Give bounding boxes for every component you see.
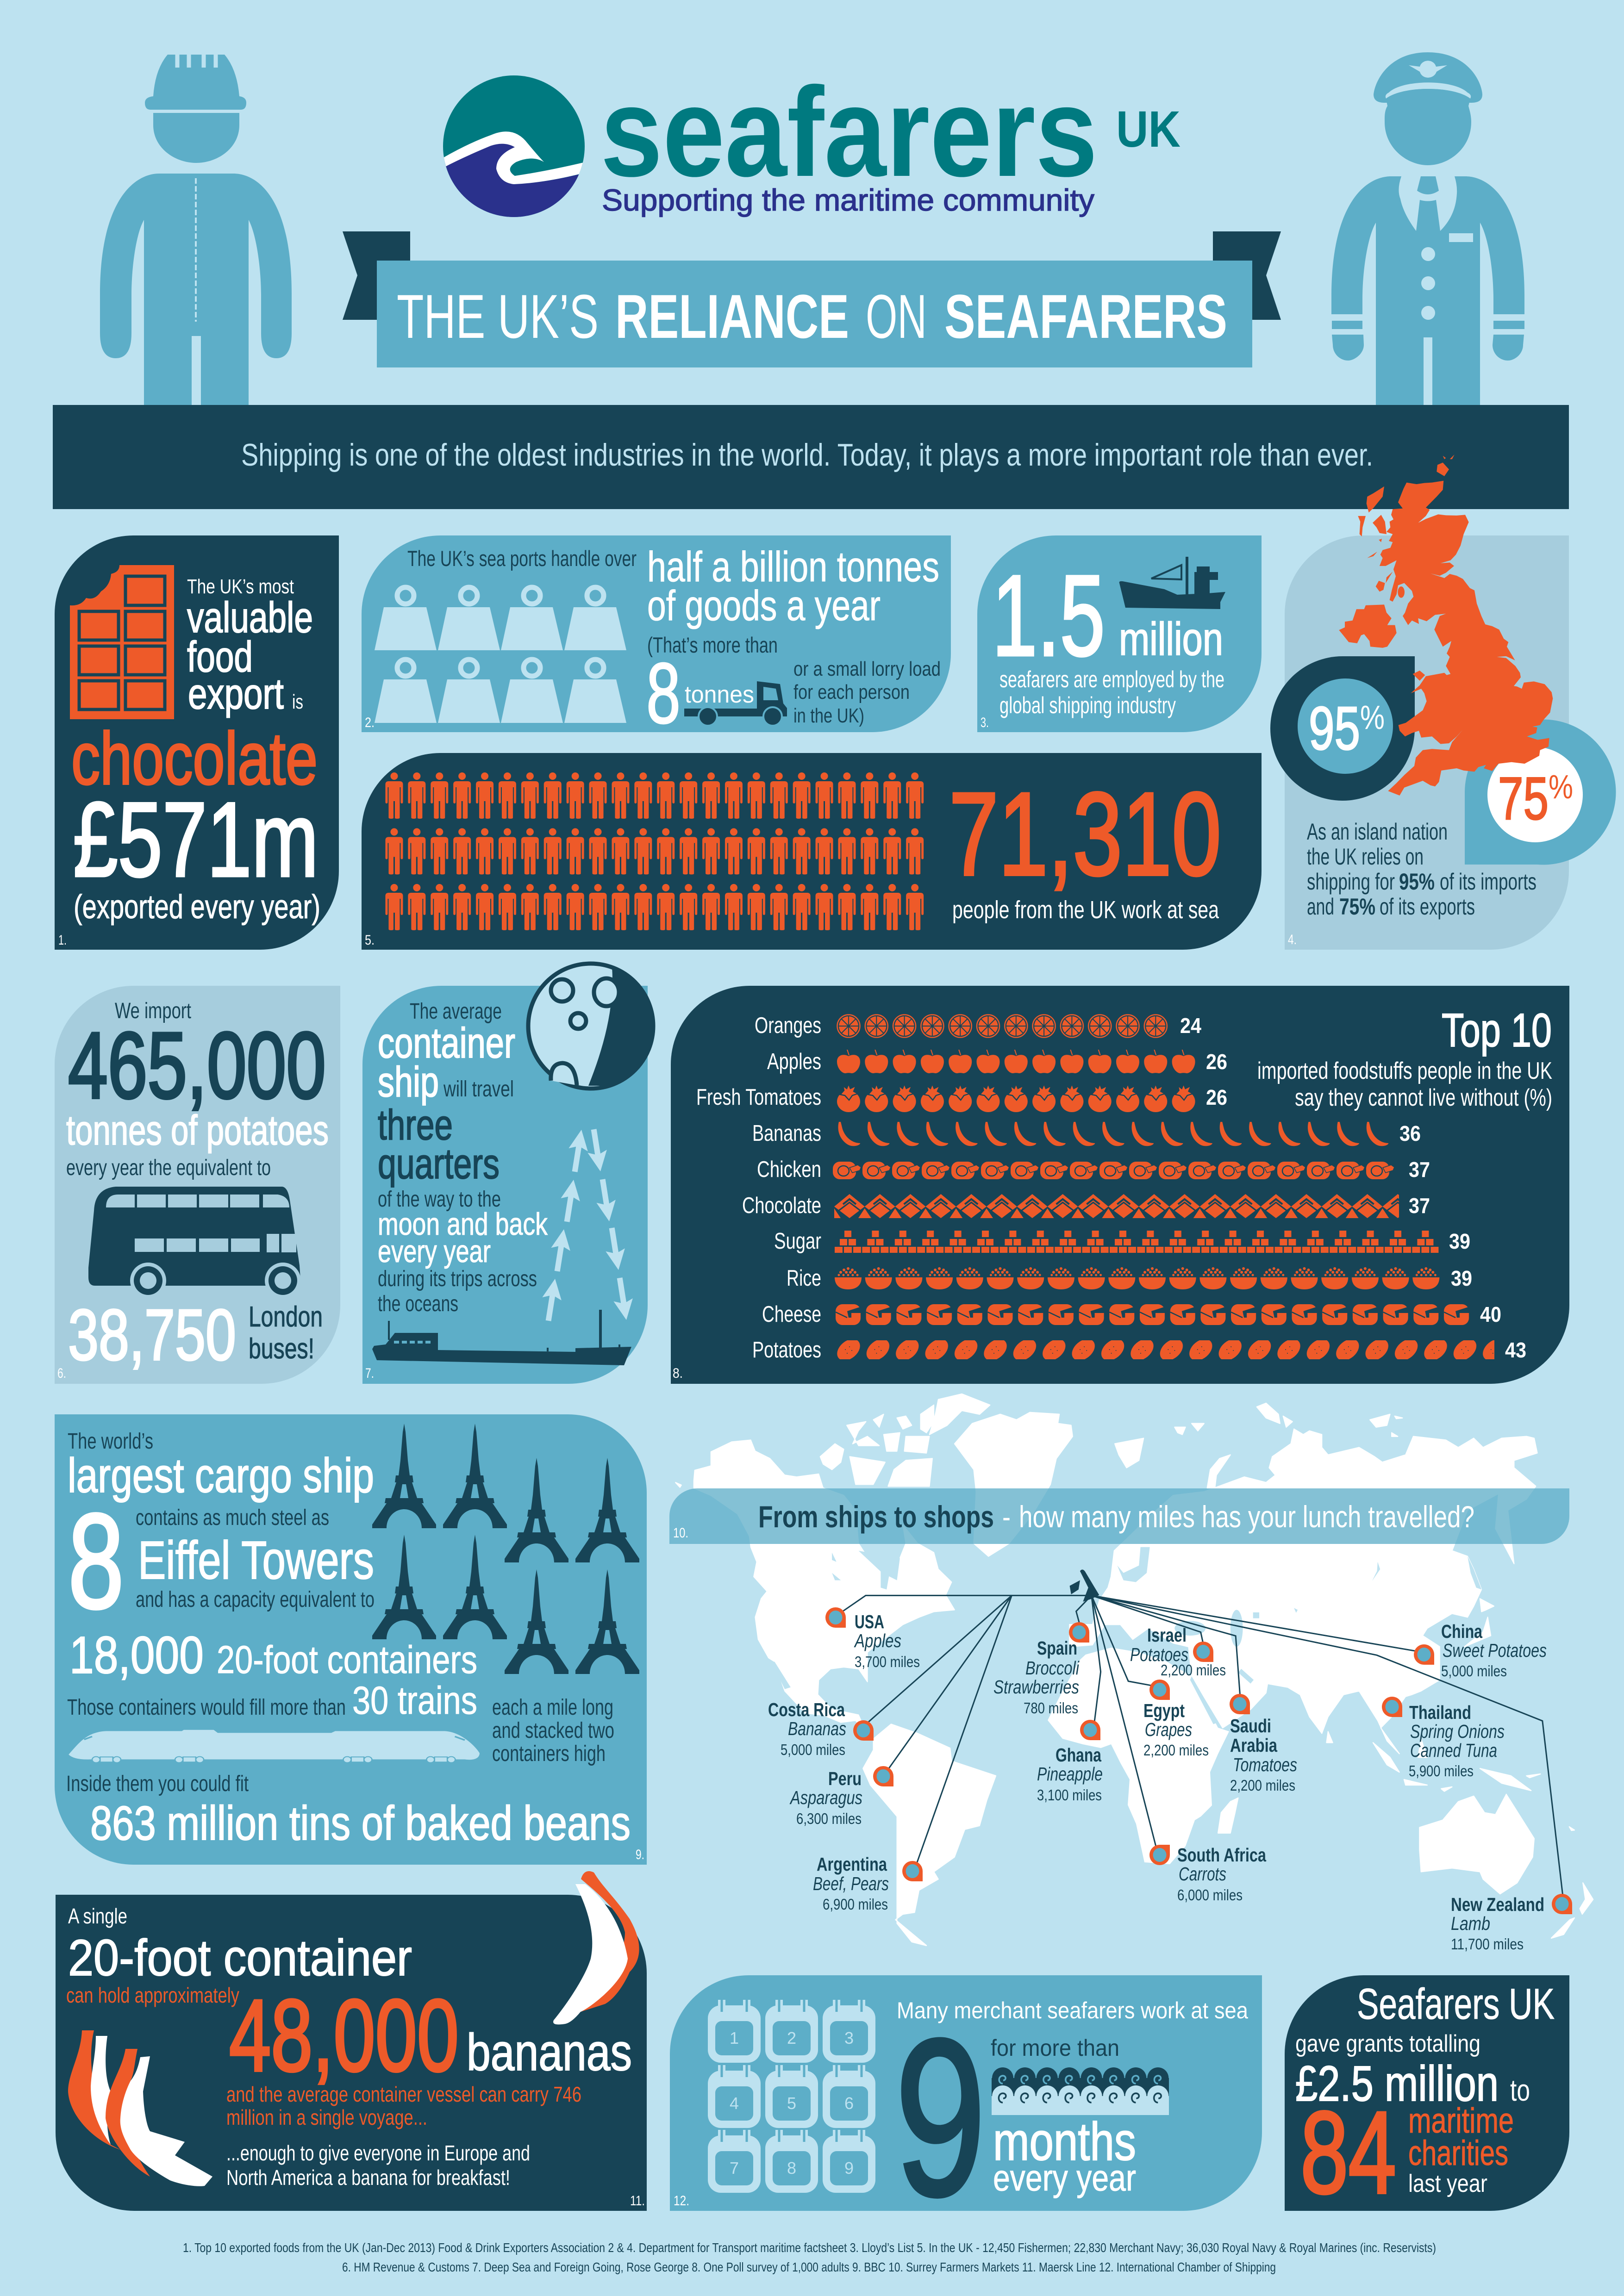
logo wordmark: seafarers: [600, 61, 1098, 203]
text: most valuable food export: The UK’s most: [187, 575, 294, 598]
row: chicken: 37: [1409, 1157, 1430, 1182]
label: Saudi Arabia: 2,200 miles: [1230, 1777, 1295, 1794]
panel 8: top 10 foodstuffs: [671, 986, 1569, 1384]
label: Spain: Spain: [1037, 1637, 1077, 1659]
text: single container: 20-foot container: [68, 1929, 412, 1986]
text: seafarers employed: [999, 666, 1224, 718]
text: baked beans: [66, 1772, 631, 1850]
text: small lorry load: or a small lorry load: [793, 658, 941, 680]
text: sea ports handle: The UK’s sea ports handle over: [407, 546, 637, 571]
row: sugar: [774, 1229, 1470, 1254]
text: island nation: the UK relies on: [1307, 844, 1424, 870]
map: Africa: [1048, 1648, 1229, 1864]
label: Israel: 2,200 miles: [1161, 1661, 1226, 1679]
text: maritime charities: maritime: [1408, 2101, 1514, 2140]
label: South Africa: 6,000 miles: [1177, 1886, 1243, 1904]
text: baked beans: 863 million tins of baked beans: [90, 1797, 631, 1850]
reference 2: 2.: [365, 715, 375, 730]
logo tagline: Supporting the maritime community: [602, 183, 1094, 217]
text: equivalent: every year the equivalent to: [66, 1156, 271, 1180]
label: USA: [854, 1611, 920, 1670]
text: single container: [66, 1904, 412, 2007]
icons: calendars: 4: [730, 2094, 739, 2113]
icon: banana bunch: [68, 2030, 212, 2186]
pictogram chart: imported foodstuffs: [696, 1013, 1526, 1363]
text: container ship journey: [378, 999, 548, 1316]
icon rows: people: [383, 772, 926, 930]
icons: calendars: 1: [730, 2028, 739, 2047]
text: most valuable food export: is: [292, 691, 303, 713]
text: seafarers employed: seafarers are employed by the: [999, 666, 1224, 692]
figure: 48,000 bananas: 48,000: [229, 1979, 459, 2092]
reference 12: 12.: [674, 2193, 689, 2209]
figure: 8 tonnes: tonnes: [685, 681, 754, 708]
text: container ship journey: will travel: [443, 1077, 514, 1101]
text: container ship journey: three: [378, 1101, 453, 1149]
text: London buses: London: [249, 1301, 323, 1333]
icons: calendars: 3: [844, 2028, 854, 2047]
worker figure: [100, 52, 292, 405]
text: months every year: [993, 2111, 1136, 2198]
row: oranges: Oranges: [755, 1013, 821, 1038]
text: 30 trains: containers high: [492, 1742, 606, 1766]
text: months every year: months: [993, 2111, 1136, 2172]
figure: 1.5 million: 1.5: [992, 551, 1105, 680]
reference 5: 5.: [365, 933, 375, 948]
row: chicken: [757, 1157, 1430, 1182]
row: cheese: [762, 1302, 1501, 1327]
reference 7: 7.: [365, 1366, 374, 1381]
label: New Zealand: 11,700 miles: [1451, 1935, 1524, 1953]
reference 4: 4.: [1288, 932, 1297, 947]
row: oranges: 24: [1180, 1014, 1201, 1038]
row: bananas: 36: [1399, 1121, 1421, 1145]
heading band: 10.: [673, 1525, 688, 1541]
text: London buses: [249, 1301, 323, 1365]
panel 12: nine months: [670, 1975, 1262, 2242]
text: most valuable food export: valuable: [187, 593, 313, 641]
text: largest cargo ship: The world’s: [68, 1429, 153, 1454]
text: container ship journey: The average: [410, 999, 502, 1024]
label: USA: 3,700 miles: [855, 1653, 920, 1670]
icon: waves: [992, 2067, 1169, 2115]
icon: large banana: [553, 1871, 639, 2024]
text: exported every year: (exported every year): [74, 889, 320, 926]
routes: [840, 1595, 1563, 1895]
label: Peru: [789, 1768, 862, 1827]
row: apples: [767, 1049, 1227, 1074]
label: Thailand: 5,900 miles: [1409, 1762, 1474, 1780]
reference 9: 9.: [636, 1847, 644, 1862]
icon: London bus: [88, 1187, 301, 1299]
label: Spain: Broccoli: [1025, 1657, 1080, 1679]
text: island nation: shipping for: [1307, 869, 1395, 895]
text: island nation: 95%: [1399, 869, 1435, 895]
text: island nation: of its imports: [1440, 869, 1537, 895]
row: chocolate: Chocolate: [742, 1193, 821, 1218]
label: Saudi Arabia: Tomatoes: [1233, 1754, 1297, 1775]
figure: 571m: £571m: [73, 780, 319, 899]
text: container ship journey: quarters: [378, 1140, 500, 1188]
text: many merchant seafarers: Many merchant seafarers work at sea: [897, 1997, 1248, 2023]
figure: 75%: 75: [1498, 765, 1549, 832]
label: Spain: [993, 1637, 1080, 1717]
text: small lorry load: for each person: [793, 681, 910, 703]
text: 30 trains: Those containers would fill more than: [67, 1695, 346, 1720]
location pins: [825, 1607, 1572, 1914]
figure: 8 tonnes: [646, 646, 754, 741]
row: apples: 26: [1206, 1050, 1227, 1074]
heading: top 10: Top 10: [1442, 1004, 1552, 1057]
icons: calendars: 5: [787, 2094, 796, 2113]
figure: 84: 84: [1300, 2088, 1396, 2218]
figure: 71,310: 71,310: [949, 768, 1221, 900]
text: people work at sea: people from the UK work at sea: [952, 896, 1219, 924]
label: Egypt: [1143, 1700, 1209, 1759]
label: Thailand: Spring Onions: [1410, 1721, 1505, 1742]
text: container ship journey: moon and back: [378, 1207, 548, 1242]
text: we import: We import: [115, 999, 191, 1023]
label: Israel: Israel: [1147, 1624, 1187, 1646]
text: maritime charities: [1408, 2101, 1514, 2197]
text: island nation: As an island nation: [1307, 819, 1448, 845]
heading: top 10: [1257, 1004, 1552, 1111]
logo UK: UK: [1116, 101, 1181, 158]
label: Peru: Asparagus: [789, 1787, 862, 1808]
row: chocolate: 37: [1409, 1194, 1430, 1218]
title banner: [343, 231, 1281, 367]
title banner: SEAFARERS: [944, 282, 1227, 351]
label: China: China: [1441, 1621, 1483, 1642]
icons: Eiffel Towers: [372, 1424, 639, 1674]
label: Ghana: [1037, 1744, 1103, 1804]
text: half a billion tonnes: half a billion tonnes: [647, 543, 939, 591]
panel 9: largest cargo ship: [55, 1414, 647, 1865]
label: Argentina: [813, 1854, 889, 1913]
label: Costa Rica: Costa Rica: [768, 1699, 845, 1720]
figure: 48,000 bananas: bananas: [467, 2023, 632, 2081]
figure: 95%: %: [1360, 699, 1385, 736]
text: most valuable food export: food: [187, 633, 253, 681]
text: half a billion tonnes: [647, 543, 939, 657]
icon: moon: [528, 958, 657, 1089]
text: seafarers employed: global shipping industry: [999, 692, 1176, 718]
label: Costa Rica: [768, 1699, 846, 1758]
title banner: RELIANCE: [615, 282, 849, 351]
text: container ship journey: every year: [378, 1234, 491, 1269]
text: 30 trains: [67, 1679, 614, 1766]
figure: 18,000 containers: [69, 1626, 477, 1684]
map: inland seas: [1117, 1547, 1481, 1724]
figure: 75%: %: [1549, 769, 1573, 806]
figure: 9: 9: [895, 1993, 986, 2242]
figure: 465,000: 465,000: [68, 1013, 326, 1118]
row: fresh tomatoes: [696, 1084, 1227, 1113]
label: China: Sweet Potatoes: [1443, 1640, 1547, 1661]
heading band: -: [1002, 1500, 1011, 1534]
label: Israel: [1130, 1624, 1226, 1679]
text: island nation: of its exports: [1380, 894, 1475, 920]
logo: [443, 75, 1180, 218]
panel 6: potatoes: [55, 986, 340, 1384]
pilot figure: [1331, 52, 1524, 405]
label: Ghana: Pineapple: [1037, 1763, 1103, 1785]
label: Ghana: 3,100 miles: [1037, 1786, 1102, 1804]
label: Saudi Arabia: [1230, 1715, 1297, 1794]
panel: Seafarers UK grants: [1285, 1975, 1569, 2218]
text: 30 trains: and stacked two: [492, 1718, 614, 1743]
row: chocolate: [742, 1193, 1430, 1218]
text: chocolate: chocolate: [71, 717, 318, 800]
text: single voyage: North America a banana for breakfast!: [226, 2165, 510, 2190]
footnotes: 6. HM Revenue & Customs 7. Deep Sea and Foreign Going, Rose George 8. One Poll survey of 1,000 adults 9. BBC 10. Surrey Farmers Markets 11. Maersk Line 12. International Chamber of Shipping: [342, 2260, 1276, 2274]
text: container ship journey: container: [378, 1020, 515, 1067]
icon: cargo ship: [1119, 557, 1225, 609]
figure: 8: 8: [68, 1486, 124, 1636]
icons: calendars: 9: [844, 2159, 854, 2178]
map: UK origin: [1070, 1569, 1099, 1602]
text: container ship journey: of the way to the: [378, 1187, 501, 1212]
logo emblem: [443, 75, 585, 217]
label: Egypt: Egypt: [1143, 1700, 1185, 1721]
footnotes: [183, 2240, 1436, 2274]
heading band: [669, 1488, 1569, 1544]
label: Saudi Arabia: Saudi: [1230, 1715, 1271, 1736]
row: chicken: Chicken: [757, 1157, 821, 1182]
icon: train: [69, 1730, 480, 1763]
reference 8: 8.: [673, 1366, 683, 1381]
text: single voyage: million in a single voyage...: [226, 2105, 427, 2129]
text: small lorry load: in the UK): [793, 704, 864, 727]
panel 3: seafarers employed: [977, 535, 1262, 732]
label: USA: Apples: [854, 1630, 901, 1651]
label: New Zealand: Lamb: [1451, 1913, 1490, 1934]
figure: 1.5 million: [992, 551, 1223, 680]
label: Argentina: Beef, Pears: [813, 1873, 889, 1894]
row: rice: 39: [1451, 1266, 1472, 1290]
label: Saudi Arabia: Arabia: [1230, 1735, 1278, 1756]
icon: container ship: [372, 1310, 631, 1365]
row: potatoes: Potatoes: [752, 1338, 821, 1363]
row: cheese: 40: [1480, 1302, 1501, 1326]
text: island nation: [1307, 819, 1537, 920]
title banner: THE UK’S: [397, 282, 599, 351]
map: Eurasia, Australasia: [1069, 1403, 1593, 1938]
row: potatoes: [752, 1338, 1526, 1363]
label: Thailand: Thailand: [1409, 1702, 1471, 1723]
icon: lorry: [684, 681, 787, 726]
panel 7: container ship: [362, 958, 657, 1384]
icons: calendars: 2: [787, 2028, 796, 2047]
row: sugar: 39: [1449, 1229, 1470, 1253]
text: small lorry load: [793, 658, 941, 727]
label: Spain: 780 miles: [1024, 1699, 1078, 1717]
text: half a billion tonnes: (That’s more than: [647, 633, 778, 657]
label: New Zealand: New Zealand: [1451, 1894, 1544, 1915]
text: 30 trains: 30 trains: [352, 1679, 477, 1722]
text: largest cargo ship: [68, 1429, 374, 1503]
label: South Africa: Carrots: [1179, 1863, 1226, 1885]
panel 10: world map: [669, 1394, 1593, 1953]
intro bar: [53, 405, 1569, 509]
text: 30 trains: each a mile long: [492, 1695, 613, 1720]
chart: 95 percent imports: [1270, 656, 1415, 801]
panel 5: people at sea: [362, 753, 1262, 950]
row: rice: Rice: [787, 1266, 821, 1291]
text: Eiffel Towers: Eiffel Towers: [138, 1530, 374, 1590]
label: Ghana: Ghana: [1056, 1744, 1102, 1766]
panel 4: island nation: [1270, 454, 1616, 950]
text: container ship journey: the oceans: [378, 1292, 458, 1316]
figure: 18,000 containers: 18,000: [69, 1626, 204, 1684]
label: Costa Rica: Bananas: [788, 1718, 846, 1739]
icons: calendars: 7: [730, 2159, 739, 2178]
text: single voyage: and the average container vessel can carry 746: [226, 2082, 581, 2106]
reference 3: 3.: [981, 715, 989, 730]
map: United Kingdom: [1339, 454, 1553, 796]
label: Spain: Strawberries: [993, 1676, 1079, 1698]
row: fresh tomatoes: 26: [1206, 1085, 1227, 1109]
row: bananas: Bananas: [752, 1121, 821, 1146]
reference 1: 1.: [58, 933, 67, 948]
text: container ship journey: during its trips across: [378, 1267, 537, 1291]
figure: 18,000 containers: 20-foot containers: [217, 1638, 477, 1681]
text: grants: gave grants totalling: [1295, 2030, 1480, 2057]
title banner: ON: [866, 282, 927, 351]
label: Israel: Potatoes: [1130, 1644, 1188, 1665]
row: rice: [787, 1266, 1472, 1291]
label: Thailand: Canned Tuna: [1410, 1740, 1497, 1761]
figure: 95%: 95: [1309, 694, 1360, 762]
label: Egypt: Grapes: [1145, 1719, 1192, 1740]
figure: 1.5 million: million: [1119, 613, 1223, 665]
text: Eiffel Towers: and has a capacity equivalent to: [136, 1587, 375, 1612]
reference 11: 11.: [630, 2193, 645, 2209]
text: maritime charities: last year: [1408, 2170, 1487, 2197]
icon: chocolate bar: [70, 565, 174, 719]
label: Argentina: 6,900 miles: [823, 1896, 888, 1913]
icons: calendars: 8: [787, 2159, 796, 2178]
reference 6: 6.: [57, 1366, 66, 1381]
text: Eiffel Towers: contains as much steel as: [136, 1506, 329, 1530]
row: bananas: [752, 1121, 1421, 1146]
icons: calendars: [708, 2000, 875, 2193]
text: most valuable food export: [187, 575, 313, 718]
label: Argentina: Argentina: [817, 1854, 887, 1875]
label: New Zealand: [1451, 1894, 1544, 1953]
text: half a billion tonnes: of goods a year: [647, 582, 881, 629]
text: grants: £2.5 million: [1295, 2055, 1499, 2111]
panel 1: chocolate: [55, 535, 339, 950]
row: sugar: Sugar: [774, 1229, 821, 1254]
text: single voyage: ...enough to give everyone in Europe and: [226, 2141, 530, 2165]
label: South Africa: South Africa: [1177, 1844, 1267, 1866]
text: baked beans: Inside them you could fit: [66, 1772, 249, 1796]
text: single container: can hold approximately: [66, 1983, 239, 2007]
heading: top 10: say they cannot live without (%): [1295, 1084, 1552, 1111]
text: for more than: for more than: [991, 2035, 1119, 2061]
row: potatoes: 43: [1505, 1338, 1526, 1362]
text: grants: to: [1510, 2073, 1530, 2107]
row: oranges: [755, 1013, 1201, 1038]
row: cheese: Cheese: [762, 1302, 821, 1327]
text: single container: A single: [68, 1904, 127, 1928]
intro bar: Shipping is one of the oldest industries in the world. Today, it plays a more important role than ever.: [241, 437, 1373, 473]
map: Americas and Arctic: [675, 1394, 1073, 1946]
text: tonnes of potatoes: tonnes of potatoes: [66, 1108, 329, 1154]
label: China: [1441, 1621, 1547, 1680]
label: USA: USA: [855, 1611, 884, 1632]
label: South Africa: [1177, 1844, 1267, 1904]
label: Thailand: [1409, 1702, 1505, 1780]
panel 11: bananas: [56, 1871, 647, 2211]
icons: calendars: 6: [844, 2094, 854, 2113]
text: London buses: buses!: [249, 1333, 314, 1365]
heading: Seafarers UK: Seafarers UK: [1357, 1979, 1555, 2028]
figure: 8 tonnes: 8: [646, 646, 681, 741]
text: maritime charities: charities: [1408, 2134, 1508, 2173]
text: Eiffel Towers: [136, 1506, 375, 1612]
text: island nation: 75%: [1339, 894, 1375, 920]
text: island nation: and: [1307, 894, 1334, 920]
heading band: From ships to shops: [758, 1500, 994, 1534]
label: Peru: 6,300 miles: [796, 1810, 862, 1827]
chart: 75 percent exports: [1465, 719, 1616, 865]
text: months every year: every year: [993, 2157, 1136, 2198]
label: China: 5,000 miles: [1441, 1662, 1507, 1680]
text: single voyage: [226, 2082, 581, 2190]
map: North American waters: [773, 1551, 900, 1689]
text: grants: [1295, 2030, 1530, 2111]
icon group: eight weights: [375, 587, 626, 723]
text: container ship journey: ship: [378, 1058, 439, 1106]
figure: 38,750: 38,750: [68, 1295, 236, 1375]
row: apples: Apples: [767, 1049, 821, 1074]
text: most valuable food export: export: [188, 670, 284, 718]
label: Peru: Peru: [828, 1768, 862, 1789]
label: Costa Rica: 5,000 miles: [781, 1741, 845, 1758]
arrows: to the moon and back: [539, 1128, 636, 1322]
row: fresh tomatoes: Fresh Tomatoes: [696, 1085, 821, 1110]
heading band: how many miles has your lunch travelled?: [1019, 1500, 1474, 1534]
text: largest cargo ship: largest cargo ship: [68, 1449, 374, 1503]
label: Egypt: 2,200 miles: [1143, 1742, 1209, 1759]
panel 2: sea ports: [362, 535, 951, 741]
